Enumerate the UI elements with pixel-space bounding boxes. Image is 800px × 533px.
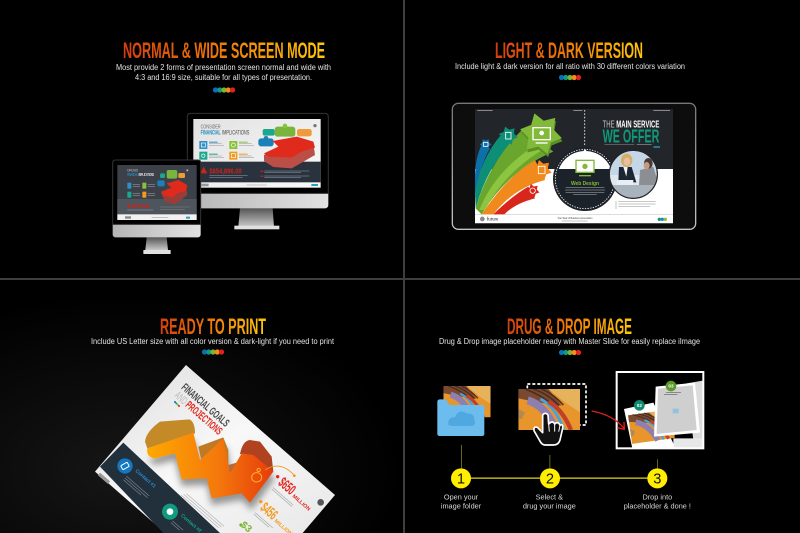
- step 2 label: Select &: [536, 492, 563, 501]
- panel: drug and drop image: [437, 314, 707, 510]
- description: versions: Include light & dark version for all ratio with 30 different colors variation: [455, 62, 685, 71]
- page heading: financial goals and projections: AND: [172, 390, 190, 407]
- slide heading: the main service we offer: THE MAIN SERVICE: [603, 119, 659, 130]
- figures: MILLION: [291, 494, 311, 513]
- title: ready to print: READY TO PRINT: [160, 314, 266, 339]
- centre circle: web design: Web Design: [571, 181, 599, 187]
- icon: dragged image with hand: [518, 384, 586, 445]
- figures: $650: [275, 475, 298, 498]
- illustration: three drag and drop steps: [437, 372, 707, 510]
- title: drug and drop image: DRUG & DROP IMAGE: [507, 314, 632, 339]
- star: teal: [499, 126, 518, 145]
- figures: $456: [257, 500, 280, 523]
- connector lines: [461, 445, 658, 479]
- centre circle: web design: [553, 147, 617, 211]
- title: normal and wide screen mode: NORMAL & WIDE SCREEN MODE: [123, 38, 325, 63]
- illustration: two desktop monitors: [113, 113, 328, 254]
- colour dots: [213, 87, 235, 93]
- rainbow arcs: [475, 128, 553, 214]
- colour dots: [559, 350, 581, 355]
- star: blue: [480, 139, 492, 150]
- step 1 label: Open your: [444, 492, 479, 501]
- photo circle: business meeting: [608, 150, 662, 198]
- step 2 badge: [540, 468, 560, 488]
- icon: placeholder frame: 02: [637, 403, 642, 408]
- step 3 label: [624, 492, 691, 510]
- step 2 badge: 2: [546, 472, 554, 488]
- step 1 label: image folder: [441, 501, 482, 510]
- slide heading: the main service we offer: WE OFFER: [603, 125, 660, 146]
- contact items: Contact #1: [134, 468, 157, 490]
- step 3 badge: [647, 468, 667, 488]
- small monitor: $654,896: [132, 204, 149, 210]
- small monitor: IMPLICATIONS: [139, 172, 154, 177]
- star: green: [520, 114, 562, 157]
- step 2 label: [523, 492, 576, 510]
- star: red: [529, 184, 540, 198]
- icon: placeholder frame: [617, 372, 707, 450]
- step 1 badge: 1: [457, 472, 465, 488]
- step 3 label: Drop into: [642, 492, 672, 501]
- page heading: financial goals and projections: PROJECTIONS: [183, 399, 224, 438]
- star: orange: [537, 160, 552, 180]
- slide heading: the main service we offer: [603, 119, 660, 148]
- large monitor: $654,896.00: [209, 166, 242, 175]
- large monitor: [187, 113, 328, 229]
- colour dots: [559, 75, 581, 80]
- large monitor: FINANCIAL: [201, 129, 221, 136]
- illustration: tablet with service slide: [452, 103, 696, 229]
- step 1 badge: [451, 468, 471, 488]
- small monitor: DRUGS: [127, 167, 138, 172]
- step 2 label: drug your image: [523, 501, 576, 510]
- title: light and dark version: LIGHT & DARK VERSION: [495, 38, 643, 63]
- slide footer: [480, 216, 667, 222]
- step 3 label: placeholder & done !: [624, 501, 691, 510]
- icon: placeholder frame: 03: [668, 384, 674, 389]
- arrow: drag to placeholder: [592, 411, 624, 429]
- figures: [238, 475, 311, 533]
- page heading: financial goals and projections: [172, 382, 231, 438]
- page heading: financial goals and projections: FINANCIAL GOALS: [179, 382, 231, 430]
- description: screen modes: 4:3 and 16:9 size, suitable for all types of presentation.: [135, 73, 312, 82]
- panel: ready to print: [91, 314, 335, 533]
- contact items: [117, 458, 203, 533]
- slide footer: Your Topic of Business presentation: [557, 217, 593, 220]
- panel: normal and wide screen mode: [113, 38, 331, 254]
- description: screen modes: [116, 63, 331, 82]
- colour dots: [202, 349, 224, 355]
- slide footer: future: [487, 217, 499, 222]
- large monitor: CONSIDER: [201, 124, 221, 130]
- large monitor: IMPLICATIONS: [222, 129, 249, 136]
- step 1 label: [441, 492, 482, 510]
- 3D zigzag arrow: [145, 419, 273, 503]
- small monitor: [113, 160, 201, 254]
- icon: image folder: [437, 386, 491, 436]
- description: screen modes: Most provide 2 forms of presentation screen normal and wide with: [116, 63, 331, 72]
- description: drag and drop: Drug & Drop image placeholder ready with Master Slide for easily replace iImage: [439, 337, 700, 346]
- description: print: Include US Letter size with all color version & dark-light if you need to print: [91, 337, 335, 346]
- small monitor: FINANCIAL: [127, 172, 138, 177]
- illustration: tilted printed page: [95, 365, 335, 533]
- step 3 badge: 3: [653, 472, 661, 488]
- panel: light and dark version: [452, 38, 696, 229]
